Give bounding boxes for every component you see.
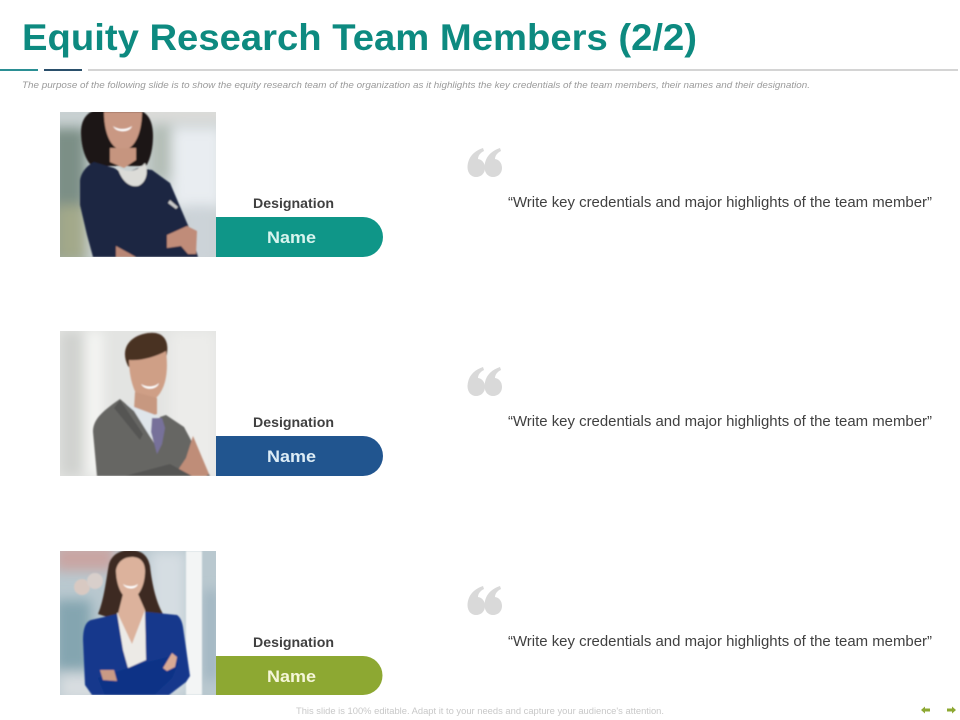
footer note: This slide is 100% editable. Adapt it to your needs and capture your audience's attention. xyxy=(296,706,664,716)
designation: Designation xyxy=(253,634,334,650)
name pill xyxy=(216,436,383,476)
team member 1 xyxy=(60,112,932,257)
credentials quote: “Write key credentials and major highlights of the team member” xyxy=(508,195,932,211)
designation: Designation xyxy=(253,195,334,211)
icon: quote mark xyxy=(468,148,502,177)
credentials quote: “Write key credentials and major highlights of the team member” xyxy=(508,414,932,430)
name: Name xyxy=(267,229,316,247)
name: Name xyxy=(267,668,316,686)
title: Equity Research Team Members (2/2) xyxy=(22,17,697,58)
credentials quote: “Write key credentials and major highlights of the team member” xyxy=(508,634,932,650)
team member 2 xyxy=(60,331,932,476)
photo: woman in navy top xyxy=(60,112,216,257)
name pill xyxy=(216,656,382,695)
header rule xyxy=(0,69,958,71)
icon: previous arrow xyxy=(921,706,930,714)
icon: quote mark xyxy=(468,586,502,615)
photo: man in grey suit xyxy=(60,331,216,476)
designation: Designation xyxy=(253,414,334,430)
icon: next arrow xyxy=(947,706,956,714)
icon: quote mark xyxy=(468,367,502,396)
subtitle description: The purpose of the following slide is to show the equity research team of the organization as it highlights the key credentials of the team members, their names and their designation. xyxy=(22,80,810,91)
photo: woman in blue blazer xyxy=(60,551,216,695)
name pill xyxy=(216,217,383,257)
name: Name xyxy=(267,448,316,466)
team member 3 xyxy=(55,545,932,700)
